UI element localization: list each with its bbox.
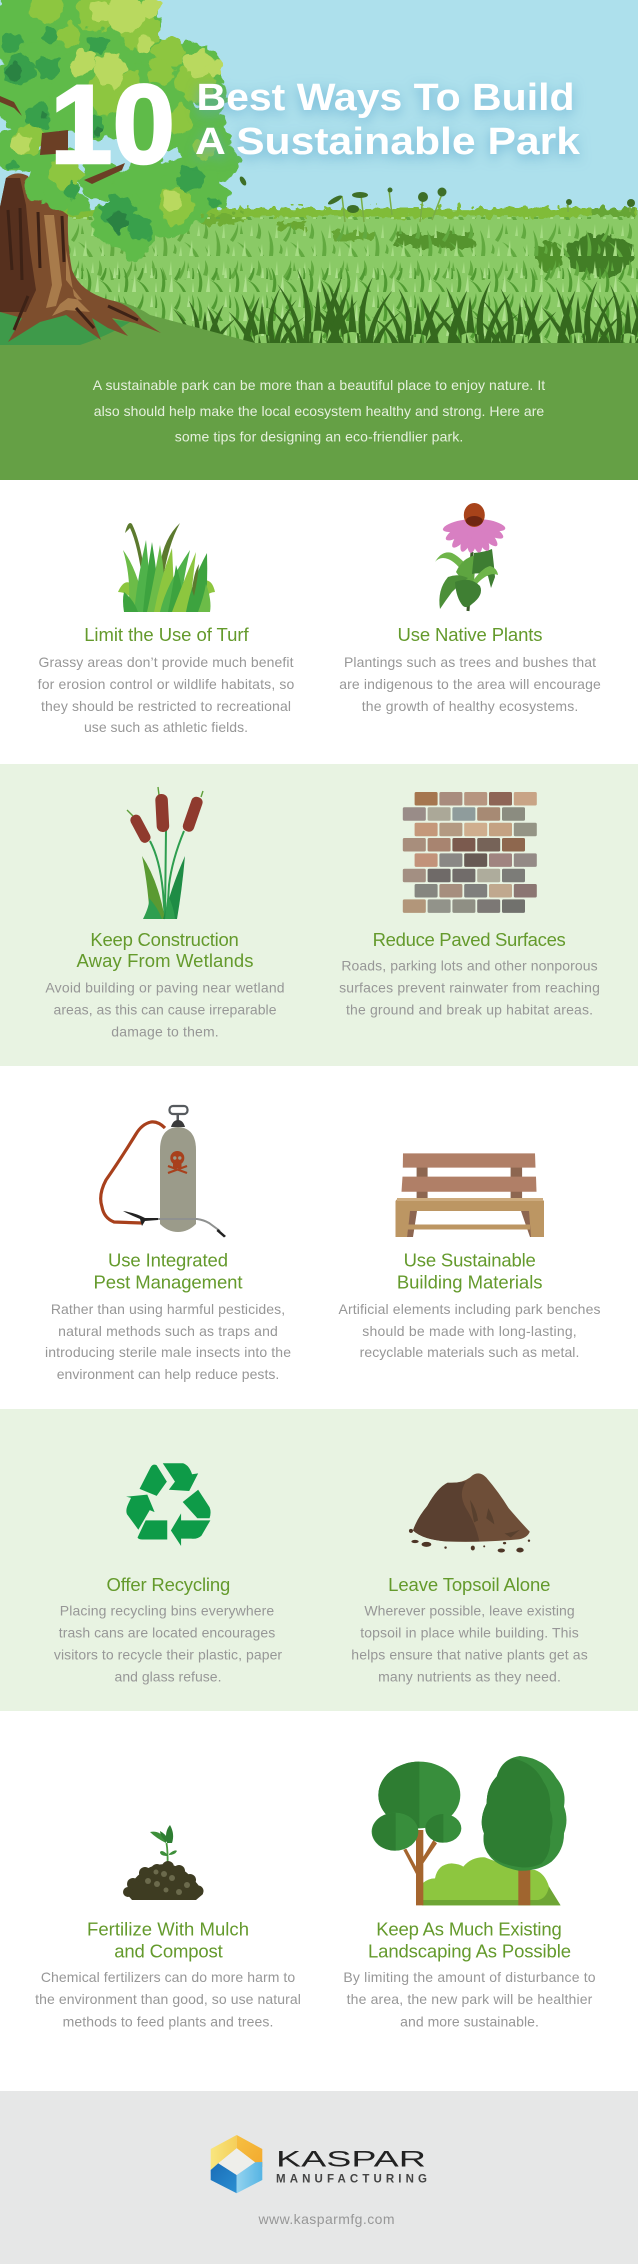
heading bbox=[368, 1918, 571, 1962]
heading: Offer Recycling bbox=[107, 1574, 230, 1595]
icon: cattails bbox=[127, 787, 204, 919]
heading bbox=[87, 1918, 249, 1962]
description: and glass refuse. bbox=[114, 1669, 222, 1685]
wildflower stalks bbox=[327, 188, 635, 222]
logo wordmark: MANUFACTURING bbox=[276, 2173, 427, 2185]
tip: Limit the Use of Turf bbox=[38, 523, 295, 735]
heading: Keep Construction bbox=[90, 929, 239, 950]
description bbox=[339, 654, 601, 714]
description: use such as athletic fields. bbox=[84, 719, 248, 735]
sky bbox=[0, 0, 638, 215]
heading: Building Materials bbox=[397, 1271, 543, 1292]
description: are indigenous to the area will encourage bbox=[339, 676, 601, 692]
tip: Use Native Plants bbox=[339, 503, 601, 714]
description bbox=[45, 980, 285, 1040]
tip: Keep As Much Existing Landscaping As Possible bbox=[343, 1756, 596, 2029]
description bbox=[54, 1603, 282, 1685]
logo wordmark bbox=[276, 2147, 427, 2185]
description: they should be restricted to recreational bbox=[41, 698, 291, 714]
tip: Fertilize With Mulch and Compost bbox=[35, 1825, 301, 2029]
heading: Pest Management bbox=[94, 1271, 242, 1292]
title number 10: 10 bbox=[50, 62, 175, 187]
tip: Offer Recycling bbox=[54, 1463, 282, 1685]
heading: Keep As Much Existing bbox=[376, 1918, 562, 1939]
green intro background bbox=[0, 343, 638, 480]
icon: park bench bbox=[396, 1153, 544, 1237]
description: Avoid building or paving near wetland bbox=[45, 980, 285, 996]
branches bbox=[0, 96, 125, 184]
description: Rather than using harmful pesticides, bbox=[51, 1301, 285, 1317]
description: Placing recycling bins everywhere bbox=[60, 1603, 274, 1619]
description: the area, the new park will be healthier bbox=[347, 1991, 593, 2007]
canopy foliage bbox=[0, 0, 238, 258]
description bbox=[338, 1301, 600, 1360]
website url: www.kasparmfg.com bbox=[258, 2211, 394, 2227]
heading: and Compost bbox=[114, 1940, 223, 1962]
description: introducing sterile male insects into the bbox=[45, 1344, 291, 1360]
title text: A Sustainable Park bbox=[195, 121, 581, 163]
intro paragraph: also should help make the local ecosystem healthy and strong. Here are bbox=[94, 403, 544, 419]
description: many nutrients as they need. bbox=[378, 1669, 561, 1685]
description: Artificial elements including park benches bbox=[338, 1301, 600, 1317]
logo mark bbox=[211, 2135, 262, 2193]
description: By limiting the amount of disturbance to bbox=[343, 1969, 596, 1985]
title text: Best Ways To Build bbox=[196, 77, 574, 119]
footer panel bbox=[0, 2091, 638, 2264]
intro paragraph: A sustainable park can be more than a beautiful place to enjoy nature. It bbox=[93, 377, 545, 393]
description: the ground and break up habitat areas. bbox=[346, 1001, 593, 1017]
description bbox=[45, 1301, 291, 1382]
description: surfaces prevent rainwater from reaching bbox=[339, 980, 600, 996]
intro paragraph: some tips for designing an eco-friendlier park. bbox=[175, 429, 463, 445]
band: pale green row 2 bbox=[0, 764, 638, 1066]
band: pale green row 4 bbox=[0, 1409, 638, 1711]
description: Wherever possible, leave existing bbox=[364, 1603, 575, 1619]
description: damage to them. bbox=[111, 1024, 219, 1040]
description bbox=[38, 654, 295, 735]
description: areas, as this can cause irreparable bbox=[54, 1002, 277, 1018]
trunk bbox=[0, 173, 161, 342]
description: and more sustainable. bbox=[400, 2013, 539, 2029]
description: Grassy areas don’t provide much benefit bbox=[38, 654, 294, 670]
icon: grass bbox=[118, 523, 215, 612]
band: white row 1 bbox=[0, 480, 638, 764]
description: should be made with long-lasting, bbox=[362, 1323, 577, 1339]
ground shadow bbox=[0, 310, 130, 345]
description bbox=[343, 1969, 596, 2029]
heading: Use Sustainable bbox=[404, 1249, 536, 1270]
icon: soil mound bbox=[409, 1473, 530, 1553]
heading: Fertilize With Mulch bbox=[87, 1918, 249, 1939]
meadow grass bbox=[0, 188, 638, 343]
tip: Leave Topsoil Alone bbox=[351, 1473, 588, 1685]
heading: Reduce Paved Surfaces bbox=[373, 929, 566, 950]
description bbox=[339, 958, 600, 1017]
heading: Away From Wetlands bbox=[76, 950, 254, 971]
foreground dark blades bbox=[165, 269, 638, 343]
description bbox=[351, 1603, 588, 1685]
heading: Use Integrated bbox=[108, 1249, 228, 1270]
description: the environment than good, so use natural bbox=[35, 1991, 301, 2007]
hero panel bbox=[0, 0, 638, 480]
tip: Reduce Paved Surfaces bbox=[339, 792, 600, 1017]
description: natural methods such as traps and bbox=[58, 1323, 278, 1339]
icon: coneflower bbox=[435, 503, 506, 611]
icon: paving bricks bbox=[403, 792, 537, 913]
description: environment can help reduce pests. bbox=[57, 1366, 279, 1382]
description: for erosion control or wildlife habitats, so bbox=[38, 676, 295, 692]
heading bbox=[397, 1249, 543, 1292]
heading: Use Native Plants bbox=[398, 624, 542, 645]
intro paragraph bbox=[93, 377, 545, 445]
description: visitors to recycle their plastic, paper bbox=[54, 1647, 282, 1663]
icon: recycling symbol bbox=[126, 1463, 211, 1546]
tree and hill bbox=[0, 0, 255, 345]
description: topsoil in place while building. This bbox=[360, 1625, 579, 1641]
tip: Use Integrated Pest Management bbox=[45, 1106, 291, 1382]
description: Roads, parking lots and other nonporous bbox=[341, 958, 598, 974]
heading bbox=[94, 1249, 242, 1292]
description: trash cans are located encourages bbox=[59, 1625, 275, 1641]
falling leaf bbox=[240, 176, 246, 186]
description: methods to feed plants and trees. bbox=[63, 2013, 273, 2029]
description: Chemical fertilizers can do more harm to bbox=[41, 1969, 295, 1985]
icon: trees and bush bbox=[372, 1756, 566, 1905]
description: Plantings such as trees and bushes that bbox=[344, 654, 596, 670]
logo wordmark: KASPAR bbox=[276, 2147, 426, 2172]
description: helps ensure that native plants get as bbox=[351, 1647, 588, 1663]
heading bbox=[76, 929, 254, 971]
icon: skull and crossbones bbox=[168, 1151, 187, 1173]
description bbox=[35, 1969, 301, 2029]
icon: pesticide sprayer bbox=[101, 1106, 226, 1238]
band: white row 3 bbox=[0, 1066, 638, 1409]
description: the growth of healthy ecosystems. bbox=[362, 698, 578, 714]
heading: Leave Topsoil Alone bbox=[388, 1574, 550, 1595]
tip: Keep Construction Away From Wetlands bbox=[45, 787, 285, 1040]
title text bbox=[195, 77, 581, 163]
band: white row 5 bbox=[0, 1711, 638, 2091]
heading: Limit the Use of Turf bbox=[84, 624, 249, 645]
description: recyclable materials such as metal. bbox=[360, 1344, 579, 1360]
icon: mulch with sprout bbox=[123, 1825, 204, 1900]
hill bbox=[86, 301, 254, 343]
heading: Landscaping As Possible bbox=[368, 1940, 571, 1962]
tip: Use Sustainable Building Materials bbox=[338, 1153, 600, 1360]
